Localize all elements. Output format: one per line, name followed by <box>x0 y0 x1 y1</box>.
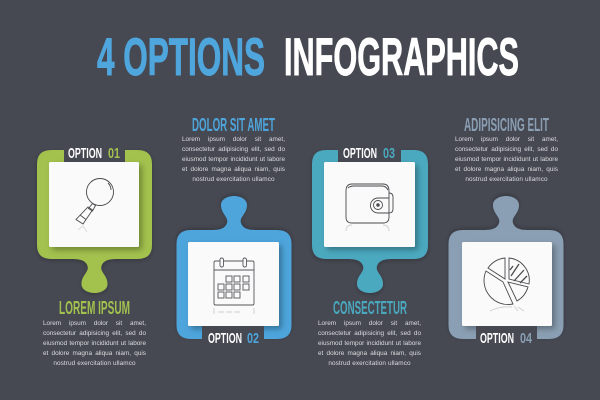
notch <box>338 146 401 162</box>
text block: option 02: Lorem ipsum dolor sit amet, <box>182 136 285 143</box>
text block: option 02: nostrud exercitation ullamco <box>192 176 275 183</box>
icon: pie chart <box>484 258 529 311</box>
panel: option 04 <box>448 196 564 347</box>
option number: 02 <box>247 330 259 347</box>
panel: option 02 <box>176 196 292 347</box>
text block: option 01: nostrud exercitation ullamco <box>53 360 136 367</box>
option label: OPTION <box>480 330 514 347</box>
text block: option 03: consectetur adipisicing elit, sed do <box>318 330 421 337</box>
text block: option 02: consectetur adipisicing elit, sed do <box>182 146 285 153</box>
text block: option 03: et dolore magna aliqua niam, quis <box>318 350 421 357</box>
grey frame with knob <box>448 196 564 339</box>
text block: option 04: eiusmod tempor incididunt ut labore <box>455 156 558 163</box>
text block: option 02: eiusmod tempor incididunt ut labore <box>182 156 285 163</box>
title <box>97 28 519 87</box>
notch <box>476 326 537 344</box>
teal frame with knob <box>312 150 428 293</box>
text block: option 04: et dolore magna aliqua niam, quis <box>455 166 558 173</box>
text block: option 01: consectetur adipisicing elit, sed do <box>43 330 146 337</box>
notch <box>202 326 264 344</box>
text block: option 02 <box>182 136 285 183</box>
option number: 04 <box>520 330 532 347</box>
text block: option 03: Lorem ipsum dolor sit amet, <box>318 320 421 327</box>
title: 4 OPTIONS <box>97 28 265 87</box>
panel: option 03 <box>312 145 428 293</box>
white card <box>462 242 552 326</box>
text block: option 01 <box>43 320 146 367</box>
white card <box>49 162 139 247</box>
text block: option 01: eiusmod tempor incididunt ut labore <box>43 340 146 347</box>
heading: lorem ipsum: LOREM IPSUM <box>59 298 130 318</box>
option label: OPTION <box>208 330 242 347</box>
text block: option 01: Lorem ipsum dolor sit amet, <box>43 320 146 327</box>
text block: option 01: et dolore magna aliqua niam, quis <box>43 350 146 357</box>
option number: 03 <box>383 145 395 162</box>
green frame with knob <box>37 150 152 293</box>
text block: option 03: eiusmod tempor incididunt ut labore <box>318 340 421 347</box>
heading: consectetur: CONSECTETUR <box>333 298 407 318</box>
text block: option 03: nostrud exercitation ullamco <box>328 360 411 367</box>
text block: option 03 <box>318 320 421 367</box>
heading: dolor sit amet: DOLOR SIT AMET <box>192 115 275 135</box>
white card <box>188 242 279 326</box>
text block: option 04: consectetur adipisicing elit, sed do <box>455 146 558 153</box>
white card <box>324 162 415 247</box>
text block: option 02: et dolore magna aliqua niam, quis <box>182 166 285 173</box>
text block: option 04: nostrud exercitation ullamco <box>465 176 548 183</box>
text block: option 04 <box>455 136 558 183</box>
panel: option 01 <box>37 145 152 293</box>
icon: magnifying glass <box>76 178 114 232</box>
option label: OPTION <box>343 145 377 162</box>
text block: option 04: Lorem ipsum dolor sit amet, <box>455 136 558 143</box>
blue frame with knob <box>176 196 292 339</box>
icon: wallet <box>346 184 393 231</box>
icon: calendar <box>214 258 254 314</box>
notch <box>64 146 125 162</box>
option number: 01 <box>108 145 120 162</box>
option label: OPTION <box>68 145 102 162</box>
